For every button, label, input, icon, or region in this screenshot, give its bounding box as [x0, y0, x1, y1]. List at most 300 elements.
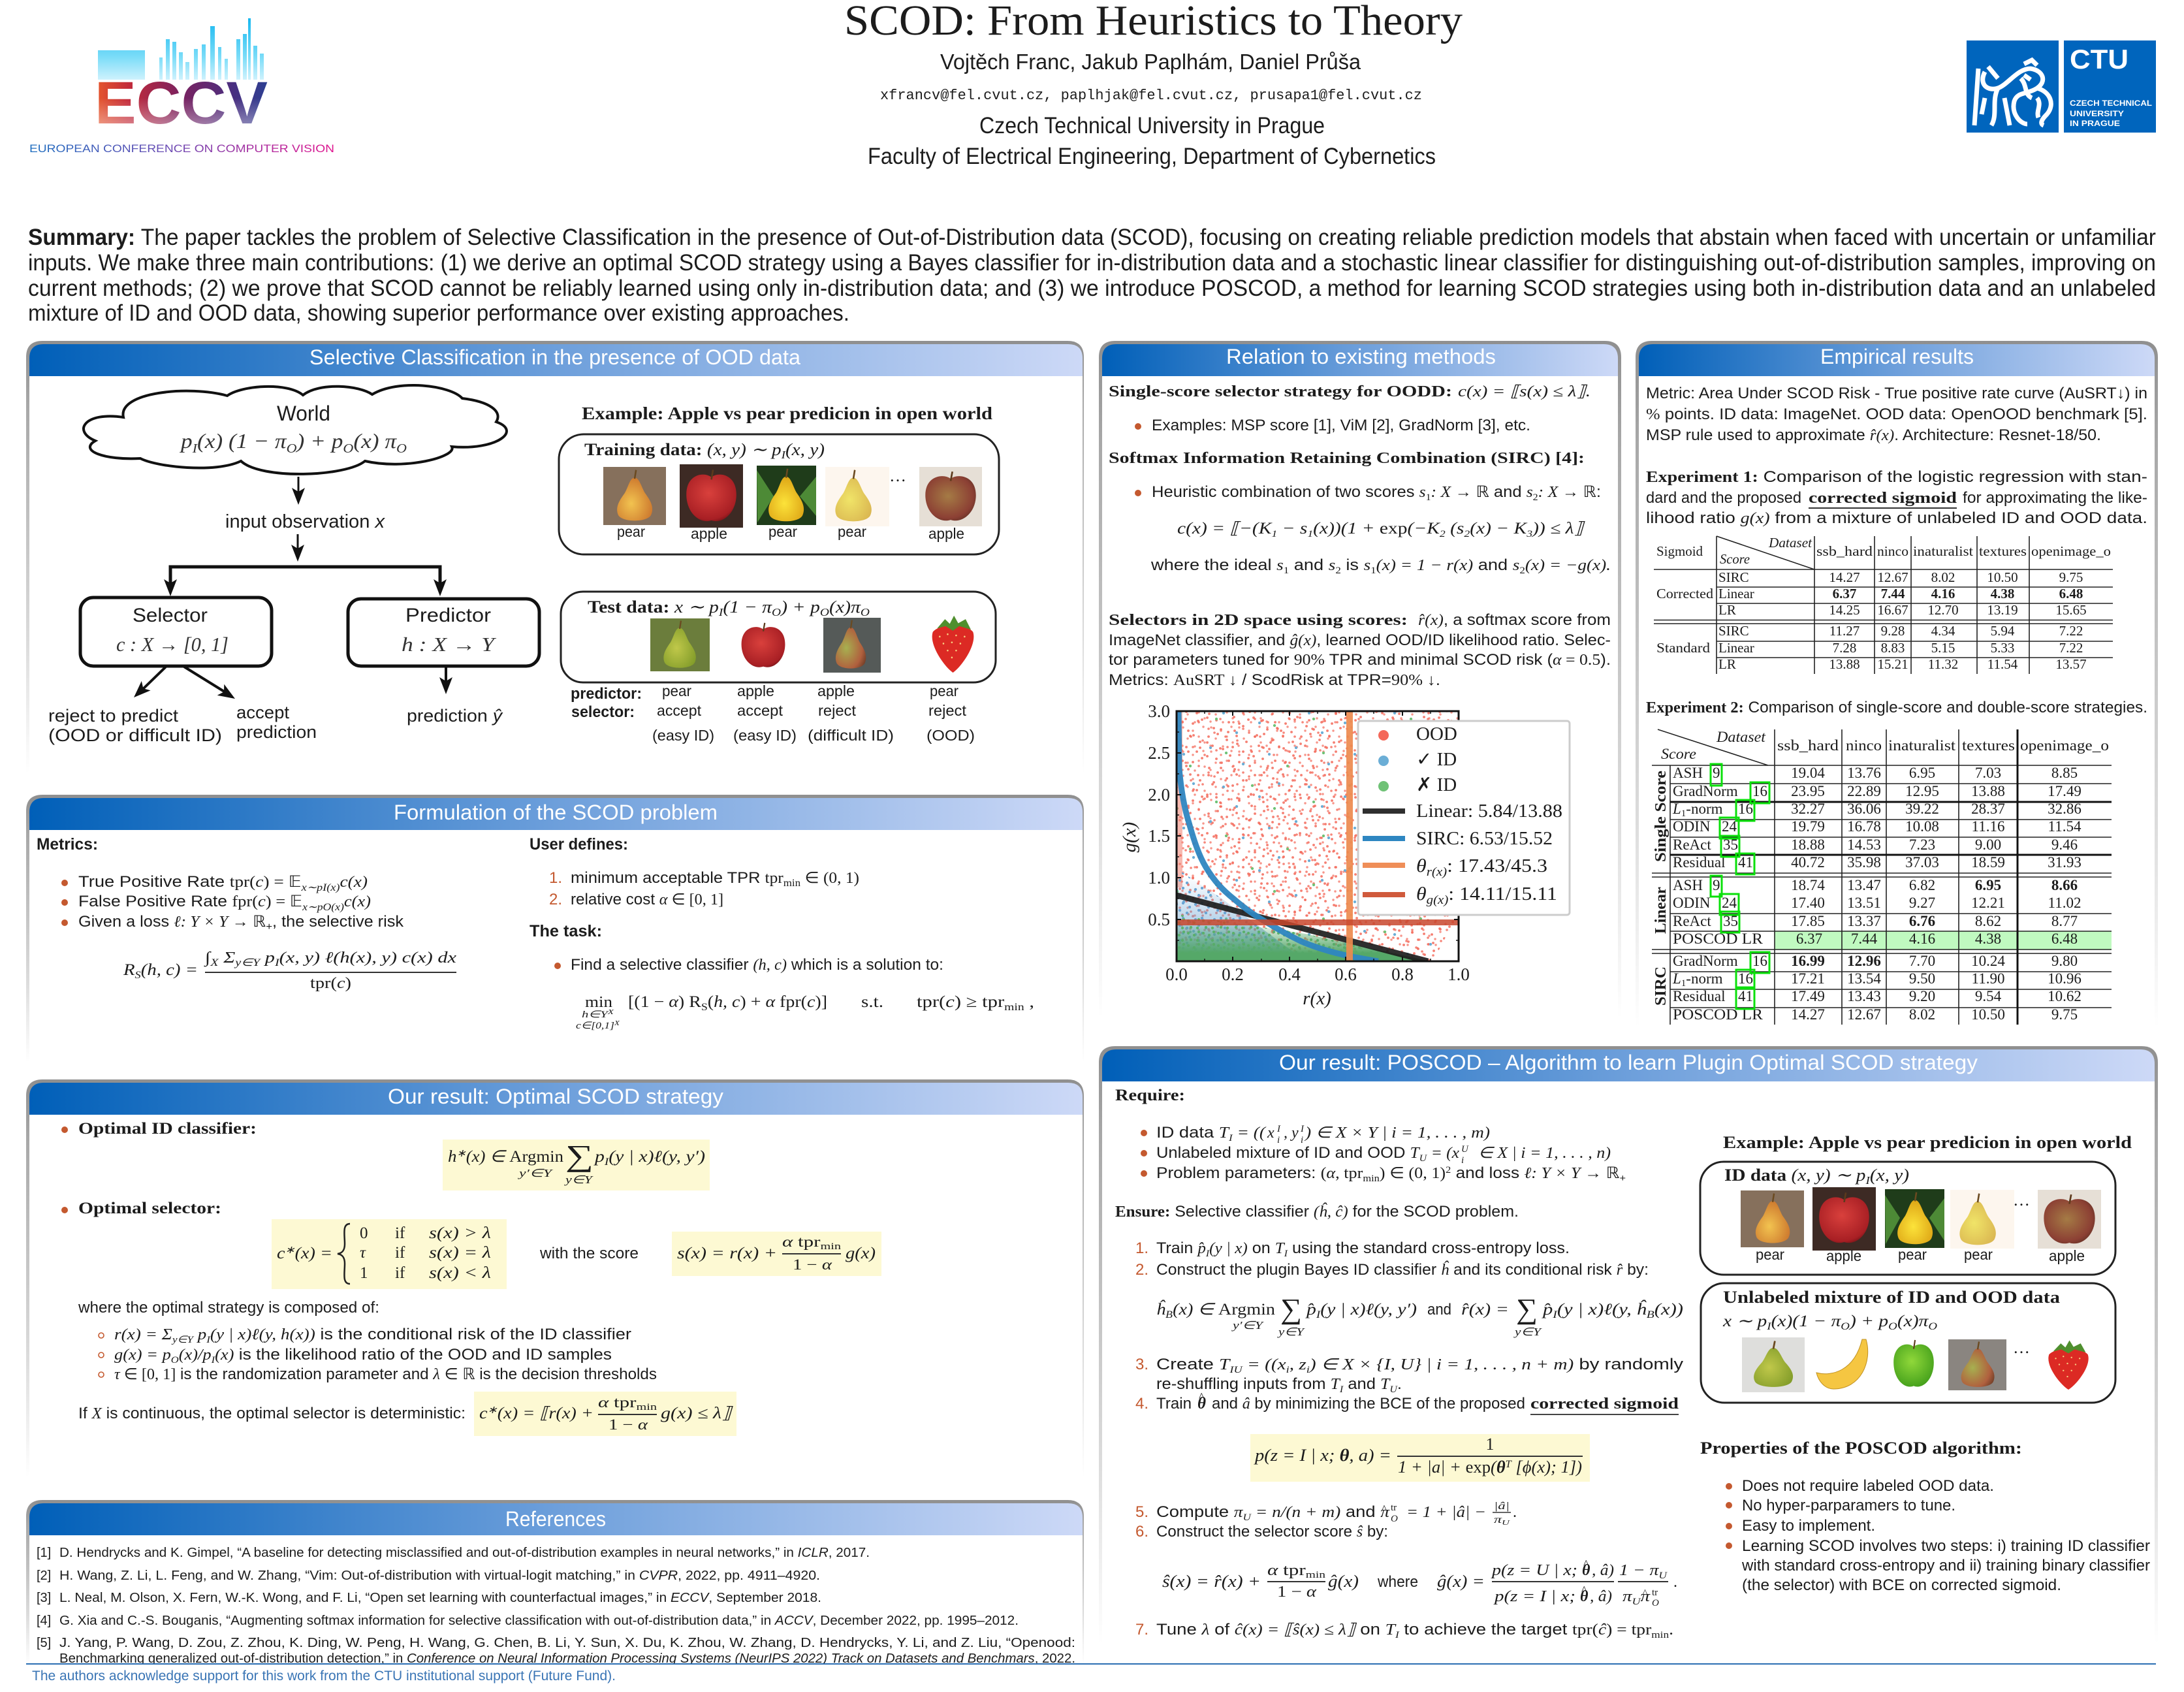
SIRC rows: 8.02: [1909, 1006, 1935, 1023]
deterministic selector formula: c: [479, 1405, 486, 1422]
SIRC rows: 1: [1681, 978, 1686, 989]
steps 3 and 4: by randomly: [1578, 1356, 1664, 1373]
steps 3 and 4: 4.: [1135, 1395, 1148, 1413]
table 2 header: Score: [1661, 746, 1696, 762]
image: red-green pear: [1948, 1339, 2006, 1390]
steps 5 and 6: Construct the selector score ŝ by:: [1156, 1523, 1388, 1540]
experiment 2 description: Experiment 2: Comparison of single-score and double-score strategies.: [1646, 699, 2147, 716]
faculty: Faculty of Electrical Engineering, Department of Cybernetics: [868, 144, 1436, 169]
optimal classifier formula: ∑: [565, 1139, 593, 1172]
y axis tick labels: [1148, 701, 1170, 929]
panel: formulation: [26, 795, 1084, 1062]
diagram: world cloud: I: [192, 441, 198, 456]
green citation boxes: [1711, 764, 1769, 1009]
image: pear: [603, 467, 666, 525]
user defines list: [549, 869, 859, 908]
table 1 rows: 4.38: [1991, 586, 2014, 601]
steps 5 and 6: [1135, 1501, 1517, 1540]
steps 5 and 6: π: [1494, 1514, 1499, 1525]
single-score text: [1109, 383, 1591, 400]
optimal selector formula: τ: [360, 1244, 366, 1262]
require list: Unlabeled mixture of ID and OOD T: [1156, 1144, 1419, 1162]
SIRC formula: c(x) = ⟦−(K: [1177, 520, 1257, 537]
steps 5 and 6: |â|: [1494, 1501, 1510, 1512]
require list: U: [1419, 1153, 1427, 1164]
selective risk formula: X: [210, 957, 219, 968]
require list: ∈ X | i = 1, . . . , n): [1478, 1145, 1611, 1162]
selective risk formula: ∫: [205, 950, 210, 966]
steps 5 and 6: = 1 + |â| −: [1406, 1504, 1486, 1521]
predictor row: apple: [817, 682, 855, 699]
linear rows: 4.16: [1909, 931, 1935, 947]
table 2 header: Dataset: [1716, 729, 1766, 745]
x axis tick labels: [1165, 965, 1470, 984]
CTU full name: [2070, 100, 2152, 128]
image: yellow pear: [1950, 1190, 2014, 1249]
table 1 header: openimage_o: [2031, 543, 2111, 559]
input observation label: input observation x: [225, 511, 386, 532]
examples bullet: Examples: MSP score [1], ViM [2], GradNorm [3], etc.: [1152, 417, 1530, 434]
image: test pear: [650, 618, 710, 671]
selective risk formula: tpr( c): [310, 975, 351, 992]
SIRC rows: 9.54: [1975, 988, 2002, 1004]
reference list: L. Neal, M. Olson, X. Fern, W.-K. Wong, and F. Li, “Open set learning with counterfactual images,” in ECCV, September 2018.: [59, 1591, 821, 1605]
optimal selector formula: if: [395, 1244, 405, 1262]
steps 5 and 6: 6.: [1135, 1523, 1148, 1540]
selective risk formula: y∈Y: [234, 957, 262, 968]
chart legend: : 17.43/45.3: [1447, 855, 1547, 876]
steps 3 and 4: Train: [1156, 1395, 1192, 1413]
group labels: Single Score: [1653, 771, 1670, 862]
test data box: Test data: x ∼ p: [588, 598, 713, 616]
unlabeled mixture box: (x)(1 − π: [1771, 1313, 1842, 1330]
heading: Relation to existing methods: [1226, 345, 1496, 368]
SIRC heading: Softmax Information Retaining Combination (SIRC) [4]:: [1109, 450, 1585, 467]
selector row: selector:: [571, 703, 635, 721]
SIRC rows: 13.43: [1847, 988, 1881, 1004]
single score rows: 9.00: [1975, 837, 2001, 853]
selector row: accept: [657, 702, 702, 719]
optimal selector formula: 1: [360, 1264, 368, 1282]
step 7: tpr(ĉ) = tpr: [1572, 1621, 1645, 1638]
optimal selector formula: if: [395, 1224, 405, 1242]
step 7: .: [1669, 1621, 1673, 1638]
chart: 2D selectors scatter: [1119, 701, 1570, 1009]
single score rows: 16: [1752, 783, 1767, 799]
properties list: with standard cross-entropy and ii) training binary classifier: [1741, 1557, 2150, 1574]
step 7: [1135, 1621, 1673, 1640]
training labels: pear: [768, 523, 797, 540]
score formula: 1 − α: [793, 1256, 832, 1273]
composition list: is the likelihood ratio of the OOD and ID samples: [238, 1346, 577, 1364]
optimal selector heading: Optimal selector:: [78, 1200, 221, 1217]
group labels: Linear: [1653, 887, 1670, 934]
selector row: [571, 702, 967, 721]
single score rows: 35.98: [1847, 854, 1881, 870]
user defines list: 2.: [549, 891, 562, 908]
steps 3 and 4: IU: [1229, 1365, 1243, 1375]
image: green pear: [1742, 1337, 1805, 1392]
heading: Our result: POSCOD – Algorithm to learn Plugin Optimal SCOD strategy: [1279, 1051, 1978, 1074]
optimisation formula: X: [614, 1019, 620, 1027]
composition list: O: [171, 1355, 179, 1365]
table 1 rows: 9.75: [2059, 569, 2083, 585]
require list: i: [1277, 1135, 1280, 1145]
authors: Vojtěch Franc, Jakub Paplhám, Daniel Průša: [940, 50, 1361, 74]
example heading: Example: Apple vs pear predicion in open world: [1723, 1133, 2132, 1152]
selector score formula: 1 − α: [1277, 1584, 1316, 1601]
steps 5 and 6: O: [1391, 1514, 1398, 1524]
plugin Bayes formula: r̂(x) =: [1461, 1301, 1509, 1318]
step 7: min: [1651, 1630, 1670, 1640]
require list: +: [1619, 1173, 1626, 1184]
optimal classifier formula: y∈Y: [563, 1173, 593, 1186]
linear rows: 6.48: [2051, 931, 2078, 947]
table 1 rows: 16.67: [1877, 602, 1908, 618]
SIRC formula: − s: [1277, 520, 1307, 537]
reference list: [2]: [37, 1569, 51, 1583]
deterministic selector formula: ∗: [488, 1405, 498, 1416]
test data box: O: [820, 606, 829, 618]
steps 3 and 4: U: [1389, 1384, 1398, 1395]
corrected sigmoid formula: 1 + |a| + exp(θ: [1398, 1458, 1505, 1477]
optimisation formula: tpr( c) ≥ tpr: [917, 993, 995, 1011]
ID data box: (x, y): [1870, 1166, 1909, 1185]
table 2 header: ninco: [1846, 737, 1882, 754]
reference list: G. Xia and C.-S. Bouganis, “Augmenting softmax information for selective classification with out-of-distribution data,” in ACCV, December 2022, pp. 1995–2012.: [59, 1614, 1019, 1628]
steps 3 and 4: and â by minimizing the BCE of the proposed: [1212, 1395, 1525, 1413]
y axis tick labels: 2.5: [1148, 743, 1170, 763]
single score rows: 37.03: [1905, 854, 1939, 870]
CTU wordmark: CTU: [2070, 44, 2129, 74]
require list: = (x: [1427, 1145, 1459, 1162]
linear rows: 6.82: [1909, 877, 1935, 893]
chart legend: OOD: [1416, 724, 1457, 744]
metrics list: False Positive Rate fpr(c) = 𝔼: [78, 893, 299, 910]
single score rows: 10.08: [1905, 818, 1939, 835]
steps 3 and 4: i: [1306, 1365, 1310, 1375]
SIRC rows: 11.90: [1972, 970, 2004, 987]
task bullet: Find a selective classifier (h, c) which is a solution to:: [571, 956, 943, 974]
image: pear on leaves: [757, 466, 816, 525]
linear rows: 12.21: [1971, 895, 2005, 911]
selector score formula: ĝ(x): [1328, 1572, 1359, 1591]
linear rows: 9.27: [1909, 895, 1935, 911]
linear rows: 18.74: [1791, 877, 1825, 893]
steps 3 and 4: Create T: [1156, 1356, 1227, 1373]
diagram: world cloud: [84, 385, 507, 474]
optimisation formula: c∈[0,1]: [576, 1021, 609, 1031]
diagram: world cloud: p: [181, 429, 191, 453]
table 1 rows: 7.22: [2059, 623, 2083, 639]
reference list: J. Yang, P. Wang, D. Zou, Z. Zhou, K. Ding, W. Peng, H. Wang, G. Chen, B. Li, Y. Sun, X. Du, K. Zhou, W. Zhang, D. Hendrycks, Y. Li, and Z. Liu, “Openood:: [59, 1636, 1075, 1650]
SIRC bullet: ℝ:: [1583, 483, 1600, 501]
diagram: world cloud: World: [277, 402, 330, 425]
deterministic selector formula: g(x) ≤ λ⟧: [661, 1405, 733, 1422]
table 1 rows: 12.67: [1877, 569, 1908, 585]
composition list: r(x) = Σ: [114, 1326, 172, 1343]
require list: ,: [1284, 1125, 1288, 1141]
diagram: world cloud: O: [287, 441, 297, 456]
plugin Bayes formula: y′∈Y: [1231, 1319, 1264, 1332]
single score rows: 40.72: [1791, 854, 1825, 870]
single score rows: 14.53: [1847, 837, 1881, 853]
steps 3 and 4: .: [1397, 1375, 1402, 1393]
SIRC selector curve: [1179, 711, 1378, 961]
y axis tick labels: 2.0: [1148, 785, 1170, 805]
single score rows: 16: [1738, 801, 1753, 817]
selector score formula: U: [1658, 1571, 1668, 1581]
SIRC rows: Residual: [1673, 988, 1725, 1004]
experiment 1 description: dard and the proposed: [1646, 489, 1801, 507]
score formula: g(x): [846, 1245, 876, 1262]
single score rows: 1: [1681, 808, 1686, 819]
selector score formula: , â): [1592, 1562, 1614, 1579]
diagram: world cloud: (x) π: [353, 429, 397, 453]
ID labels: pear: [1898, 1246, 1927, 1263]
table 1 rows: LR: [1718, 602, 1736, 618]
predictor box: h : X → Y: [402, 633, 496, 656]
accept label: prediction: [236, 722, 317, 742]
optimisation formula: [(1 − α) R: [628, 993, 699, 1011]
chart legend: : 14.11/15.11: [1448, 884, 1557, 904]
deterministic selector formula: min: [637, 1402, 657, 1413]
selector score formula: 1 − π: [1619, 1562, 1653, 1579]
optimal classifier formula: y′∈Y: [517, 1167, 553, 1179]
deterministic selector formula: (x) = ⟦r(x) +: [498, 1405, 593, 1422]
metrics list: x∼pI(x): [300, 882, 340, 893]
single score rows: 41: [1738, 854, 1753, 870]
test data box: O: [861, 606, 870, 618]
single score rows: 11.54: [2048, 818, 2081, 835]
panel: references: [26, 1500, 1084, 1666]
require list: U: [1461, 1144, 1469, 1155]
single score rows: 6.95: [1909, 765, 1935, 781]
single score rows: 7.03: [1975, 765, 2001, 781]
ID type row: (difficult ID): [808, 727, 894, 744]
scatter points: [1177, 711, 1459, 961]
single-score text: c(x) = ⟦s(x) ≤ λ⟧.: [1458, 383, 1591, 400]
plugin Bayes formula: B: [1647, 1309, 1654, 1320]
metrics list: Given a loss ℓ: Y × Y → ℝ: [78, 913, 265, 931]
x axis tick labels: 0.8: [1391, 965, 1414, 984]
ideal scores text: s: [1364, 557, 1370, 574]
deterministic selector formula: 1 − α: [609, 1416, 648, 1433]
single score rows: 22.89: [1847, 783, 1881, 799]
SIRC rows: [1672, 953, 2081, 1023]
training data box: Training data: (x, y) ∼ p: [584, 440, 773, 459]
image: green apple: [1893, 1340, 1934, 1387]
linear rows: 6.37: [1796, 931, 1822, 947]
selector score formula: tr: [1652, 1588, 1658, 1598]
selector score formula: p(z = U | x;: [1491, 1562, 1577, 1579]
linear rows: 9: [1713, 877, 1720, 893]
ID data box: [1700, 1162, 2115, 1275]
reference list: Benchmarking generalized out-of-distribution detection,” in Conference on Neural Information Processing Systems (NeurIPS 2022) Track on Datasets and Benchmars , 2022.: [59, 1652, 1075, 1666]
require list: and loss: [1451, 1164, 1524, 1182]
optimisation formula: min: [1004, 1002, 1024, 1013]
table 1 rows: 9.28: [1881, 623, 1905, 639]
unlabeled mixture box: Unlabeled mixture of ID and OOD data: [1723, 1288, 2060, 1307]
single score rows: 16.78: [1847, 818, 1881, 835]
linear rows: 13.51: [1847, 895, 1881, 911]
score formula: s(x) = r(x) +: [677, 1245, 777, 1262]
test data box: I: [718, 606, 724, 618]
plugin Bayes formula: I: [1552, 1309, 1558, 1320]
ID labels: [1756, 1246, 2085, 1264]
user defines list: 1.: [549, 869, 562, 887]
linear rows: 24: [1722, 895, 1737, 911]
require list: ) ∈ (0, 1): [1380, 1165, 1446, 1182]
ideal scores text: (x) = −g(x).: [1525, 557, 1611, 574]
table 1 rows: 8.83: [1881, 640, 1905, 656]
selectors description: r̂(x), a softmax score from: [1418, 611, 1611, 629]
optimal classifier formula: (x) ∈: [466, 1148, 509, 1166]
arrow: prediction: [439, 667, 452, 694]
SIRC formula: (s: [1446, 520, 1464, 537]
linear rows: 35: [1723, 913, 1738, 929]
steps 3 and 4: corrected sigmoid: [1530, 1396, 1679, 1413]
ECCV letters: ECCV: [95, 70, 268, 136]
table 1 header: [1656, 535, 2111, 567]
selective risk formula: Σ: [219, 950, 235, 966]
table: experiment 1: [1654, 535, 2113, 674]
CTU text tile: [2064, 40, 2156, 133]
chart legend: ✓ ID: [1416, 748, 1457, 770]
optimisation formula: X: [607, 1008, 615, 1016]
single score rows: 12.95: [1905, 783, 1939, 799]
table 2 header: inaturalist: [1888, 737, 1956, 754]
steps 5 and 6: .: [1513, 1504, 1517, 1521]
properties list: Does not require labeled OOD data.: [1742, 1477, 1994, 1495]
SIRC rows: 41: [1738, 988, 1753, 1004]
image: test apple: [742, 623, 785, 667]
selector row: accept: [737, 702, 783, 719]
table 1 rows: 11.27: [1829, 623, 1860, 639]
SIRC rows: 10.96: [2048, 970, 2081, 987]
table 2 rules: [1652, 729, 2112, 1025]
steps 1 and 2: Train p̂: [1156, 1239, 1205, 1257]
optimisation formula: min: [585, 994, 612, 1011]
composition list: p: [193, 1326, 206, 1343]
selector score formula: where: [1377, 1573, 1418, 1591]
selector score formula: ^: [1583, 1557, 1589, 1571]
ECCV caption: EUROPEAN CONFERENCE ON COMPUTER VISION: [29, 142, 334, 155]
selector score formula: ĝ(x) =: [1437, 1572, 1485, 1591]
selector row: reject: [928, 702, 967, 719]
panel: empirical results: [1636, 341, 2158, 1027]
require list: 2: [1446, 1165, 1451, 1175]
SIRC formula: (x) − K: [1470, 520, 1528, 537]
table 2 header: [1661, 729, 2109, 762]
steps 3 and 4: I: [1339, 1384, 1344, 1395]
SIRC formula: 2: [1464, 529, 1470, 539]
ID labels: apple: [1826, 1247, 1861, 1264]
steps 3 and 4: i: [1286, 1365, 1290, 1375]
optimal selector formula: 0: [360, 1224, 368, 1242]
ideal scores text: 1: [1284, 566, 1289, 576]
test data box: O: [772, 606, 781, 618]
plugin Bayes formula: ∑: [1516, 1293, 1538, 1325]
task heading: The task:: [530, 922, 602, 940]
heading: Selective Classification in the presence of OOD data: [309, 345, 800, 369]
linear rows: 4.38: [1975, 931, 2001, 947]
steps 3 and 4: T: [1380, 1376, 1391, 1393]
x axis label: r(x): [1303, 988, 1331, 1009]
user defines heading: User defines:: [530, 835, 628, 854]
unlabeled mixture box: O: [1888, 1321, 1897, 1332]
optimal classifier formula: ∗: [456, 1148, 466, 1159]
single score rows: 28.37: [1971, 801, 2005, 817]
single score rows: 19.79: [1791, 818, 1825, 835]
diagram: world cloud: O: [343, 441, 353, 456]
SIRC rows: 16: [1752, 953, 1767, 969]
steps 5 and 6: tr: [1391, 1503, 1397, 1513]
metrics list: +: [266, 921, 272, 933]
SIRC rows: GradNorm: [1673, 953, 1738, 969]
properties list: Learning SCOD involves two steps: i) training ID classifier: [1742, 1537, 2150, 1555]
metrics list: c(x): [344, 893, 371, 910]
selector score formula: p(z = I | x;: [1493, 1588, 1575, 1605]
step 7: to achieve the target: [1399, 1621, 1572, 1638]
experiment 1 description: corrected sigmoid: [1809, 490, 1957, 507]
steps 3 and 4: ) ∈ X × {I, U} | i = 1, . . . , n + m): [1308, 1356, 1574, 1373]
table 1 header: Sigmoid: [1656, 543, 1703, 559]
linear selector line: [1177, 895, 1428, 961]
require list: = ((: [1233, 1125, 1267, 1141]
table 1 rows: 13.57: [2055, 656, 2087, 672]
optimal selector formula: if: [395, 1264, 405, 1282]
x axis tick labels: 0.0: [1165, 965, 1188, 984]
summary text block: mixture of ID and OOD data, showing superior performance over existing approaches.: [28, 300, 849, 326]
steps 5 and 6: and π: [1345, 1503, 1388, 1521]
plugin Bayes formula: ∑: [1280, 1293, 1302, 1325]
table 1 rows: 7.28: [1833, 640, 1856, 656]
single score rows: 32.27: [1791, 801, 1825, 817]
steps 3 and 4: , z: [1290, 1356, 1307, 1373]
selector score formula: ŝ(x) = r̂(x) +: [1162, 1572, 1261, 1591]
require list: x: [1267, 1125, 1274, 1141]
SIRC rows: 10.24: [1971, 953, 2005, 969]
arrow: fork: [164, 567, 447, 596]
arrow: reject: [134, 667, 166, 697]
require list: i: [1461, 1155, 1464, 1166]
plugin Bayes formula: and: [1427, 1301, 1451, 1318]
table 1 rows: SIRC: [1718, 569, 1749, 585]
x axis tick labels: 0.4: [1278, 965, 1301, 984]
training data box: (x, y): [785, 440, 825, 459]
SIRC bullet: 2: [1533, 492, 1538, 503]
SIRC formula: 2: [1440, 529, 1446, 539]
steps 3 and 4: re-shuffling inputs from T: [1156, 1375, 1339, 1393]
linear rows: 6.95: [1975, 877, 2001, 893]
optimisation formula: [576, 993, 1034, 1031]
table 1 rows: 10.50: [1987, 569, 2018, 585]
table 1 header: ninco: [1877, 543, 1908, 559]
SIRC rows: 9.75: [2051, 1006, 2078, 1023]
table 1 rows: 13.88: [1829, 656, 1860, 672]
ideal scores text: is: [1341, 556, 1364, 574]
table 1 rows: Linear: [1718, 586, 1754, 601]
single score rows: 36.06: [1847, 801, 1881, 817]
y axis tick labels: 0.5: [1148, 910, 1170, 929]
single score rows: 18.59: [1971, 854, 2005, 870]
table 1 rows: 5.15: [1931, 640, 1955, 656]
SIRC rows: 9.50: [1909, 970, 1935, 987]
y axis label: g(x): [1119, 822, 1140, 852]
example heading: Example: Apple vs pear predicion in open world: [582, 404, 992, 423]
selector score formula: π: [1622, 1588, 1630, 1605]
